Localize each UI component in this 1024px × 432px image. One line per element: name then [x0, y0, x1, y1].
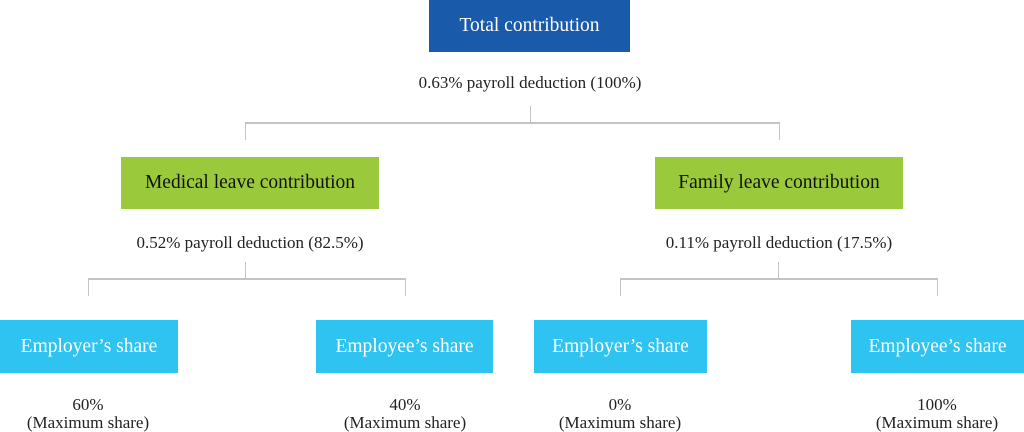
- box: family leave contribution: [655, 157, 903, 209]
- box: medical employee share: Employee’s share: [335, 336, 474, 356]
- box: family employer share: Employer’s share: [552, 336, 689, 356]
- text: 60%: 60%: [72, 395, 104, 414]
- box: medical employee share: [316, 320, 493, 373]
- text: 100%: (Maximum share): [876, 413, 998, 432]
- box: family employee share: [851, 320, 1024, 373]
- text: 0%: [559, 395, 681, 432]
- text: 40%: (Maximum share): [344, 413, 466, 432]
- box: medical leave contribution: Medical leave contribution: [145, 172, 355, 193]
- text: medical deduction: 0.52% payroll deduction (82.5%): [136, 233, 364, 252]
- text: 60%: (Maximum share): [27, 413, 149, 432]
- text: 40%: 40%: [389, 395, 421, 414]
- text: 0%: (Maximum share): [559, 413, 681, 432]
- box: medical employer share: [0, 320, 178, 373]
- box: medical employer share: Employer’s share: [21, 336, 157, 356]
- text: 60%: [27, 395, 149, 432]
- text: 100%: [876, 395, 998, 432]
- text: total deduction: 0.63% payroll deduction (100%): [419, 73, 641, 92]
- text: 0%: 0%: [609, 395, 631, 414]
- text: 100%: 100%: [917, 395, 957, 414]
- title box: total contribution: Total contribution: [460, 15, 600, 36]
- text: family deduction: 0.11% payroll deduction (17.5%): [666, 233, 892, 252]
- text: 40%: [344, 395, 466, 432]
- box: medical leave contribution: [121, 157, 379, 209]
- box: family leave contribution: Family leave contribution: [678, 172, 880, 193]
- box: family employer share: [534, 320, 707, 373]
- title box: total contribution: [429, 0, 630, 52]
- box: family employee share: Employee’s share: [868, 336, 1007, 356]
